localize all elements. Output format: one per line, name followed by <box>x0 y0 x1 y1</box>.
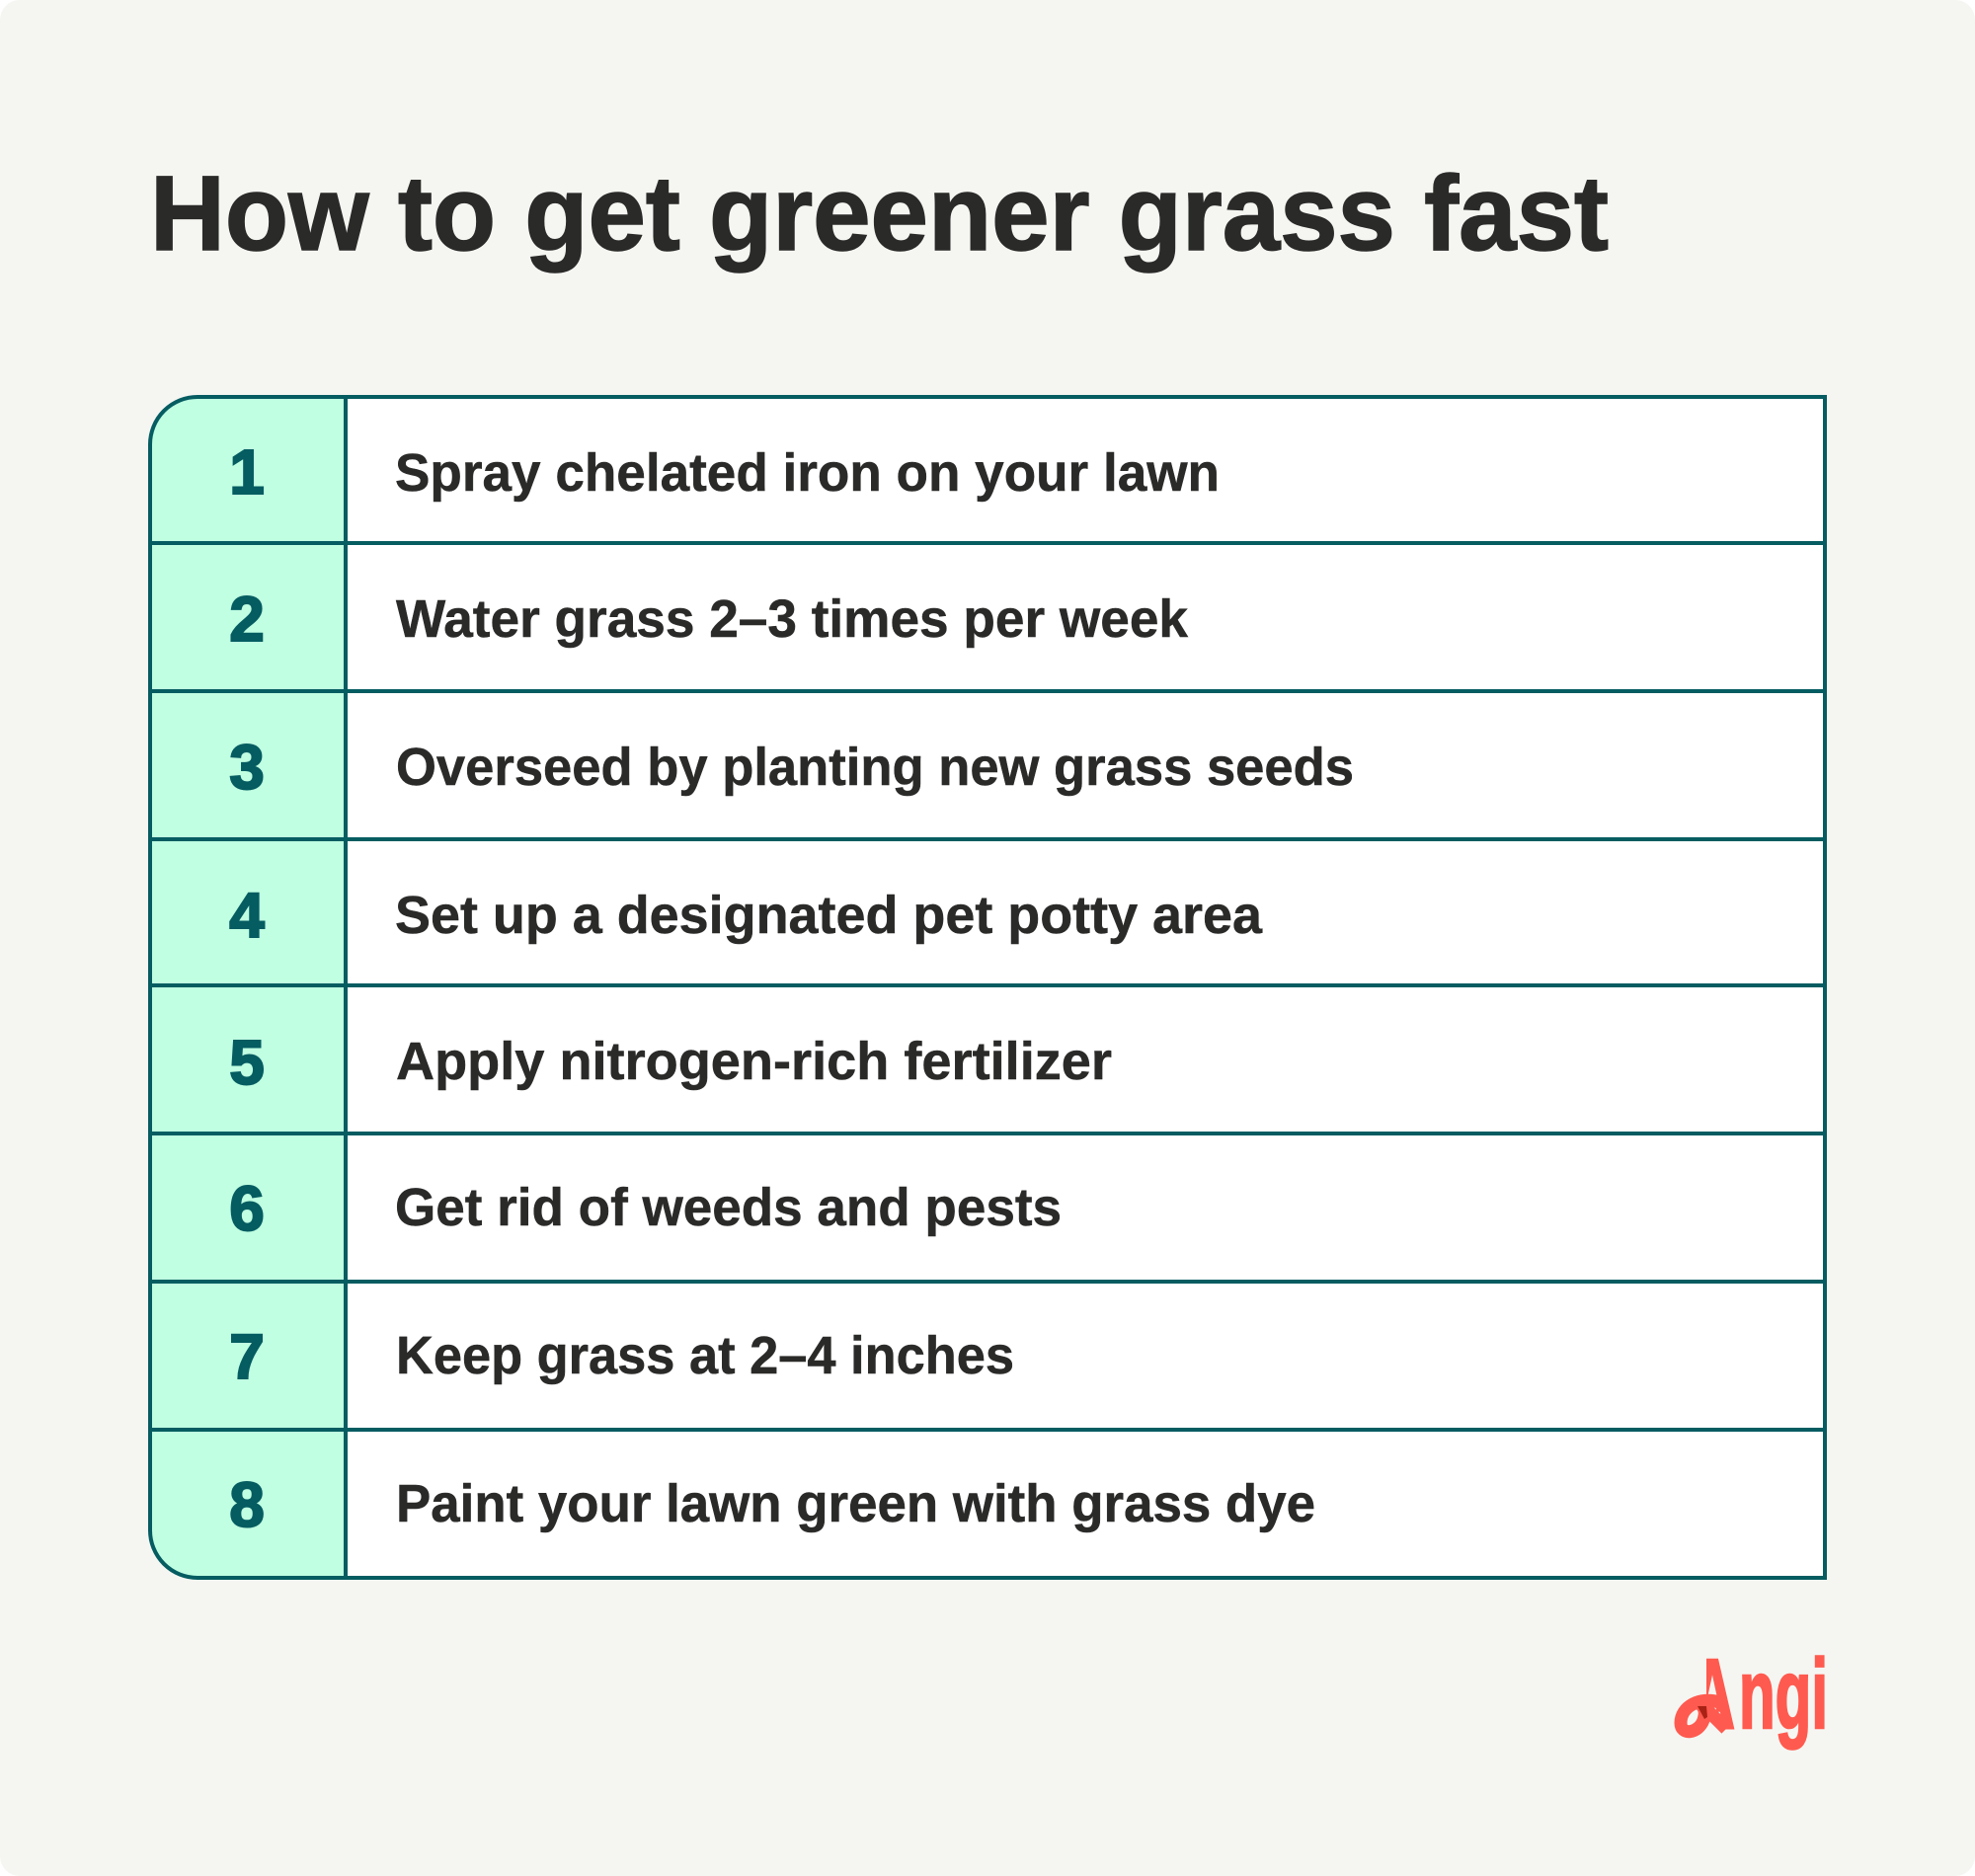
step 7: 7 <box>229 1321 265 1392</box>
step 5: Apply nitrogen-rich fertilizer <box>396 1032 1112 1091</box>
logo wordmark: A <box>1690 1639 1735 1750</box>
step 4: 4 <box>229 880 265 951</box>
logo fold accent <box>1698 1706 1707 1719</box>
step 3: 3 <box>229 732 265 803</box>
step 2: 2 <box>229 584 265 655</box>
table body background <box>150 397 1825 1578</box>
step 1 <box>229 436 1220 508</box>
logo: Angi <box>1675 1655 1825 1751</box>
step 3 <box>229 732 1354 803</box>
step 4: Set up a designated pet potty area <box>395 886 1263 945</box>
step 6: 6 <box>229 1173 265 1244</box>
step 1: 1 <box>229 436 265 508</box>
step 1: Spray chelated iron on your lawn <box>395 443 1220 503</box>
step 7 <box>229 1321 1014 1392</box>
step 2 <box>229 584 1189 655</box>
title: How to get greener grass fast <box>150 153 1609 273</box>
number column background <box>150 397 346 1578</box>
logo wordmark <box>1706 1655 1825 1751</box>
step 8: 8 <box>229 1469 265 1540</box>
step 2: Water grass 2–3 times per week <box>396 589 1189 649</box>
step 5 <box>229 1027 1112 1098</box>
step 7: Keep grass at 2–4 inches <box>396 1326 1014 1385</box>
table outline <box>150 397 1825 1578</box>
logo wordmark: ngi <box>1739 1639 1828 1750</box>
step 6 <box>229 1173 1062 1244</box>
step 4 <box>229 880 1263 951</box>
logo swash <box>1681 1700 1726 1732</box>
step 6: Get rid of weeds and pests <box>395 1178 1062 1237</box>
step 3: Overseed by planting new grass seeds <box>396 738 1354 797</box>
step 8 <box>229 1469 1315 1540</box>
table: steps <box>150 397 1825 1578</box>
step 5: 5 <box>229 1027 265 1098</box>
step 8: Paint your lawn green with grass dye <box>396 1474 1315 1533</box>
